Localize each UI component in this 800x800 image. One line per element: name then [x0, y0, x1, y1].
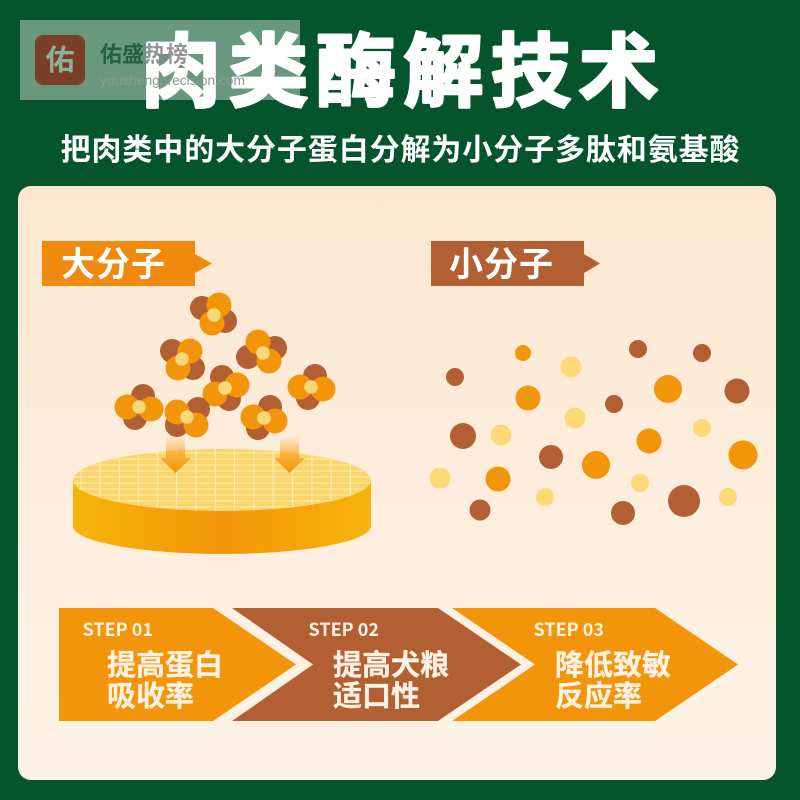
watermark url: youshengprecision.com: [100, 73, 245, 88]
label: large molecules: [42, 241, 212, 286]
step 3 arrow: 反应率: [555, 680, 642, 713]
title: 肉类酶解技术: [141, 28, 666, 117]
arrow: right down: [274, 436, 305, 473]
step 2 arrow: STEP 02: [308, 616, 379, 642]
step 1 arrow: STEP 01: [82, 616, 153, 642]
watermark: [20, 20, 300, 100]
step 1 arrow: 吸收率: [107, 680, 194, 713]
illustration: enzyme disc: [73, 449, 371, 554]
illustration: large molecule clusters: [114, 292, 336, 440]
watermark logo: [35, 35, 85, 85]
subtitle: 把肉类中的大分子蛋白分解为小分子多肽和氨基酸: [61, 134, 740, 167]
watermark name: 佑盛热榜: [100, 42, 188, 67]
panel: enzymolysis diagram: [18, 186, 776, 780]
step 3 arrow: [452, 608, 738, 721]
step 1 arrow: [59, 608, 296, 721]
step 2 arrow: [232, 608, 521, 721]
arrow: left down: [160, 436, 191, 473]
step 3 arrow: STEP 03: [534, 616, 604, 642]
step 3 arrow: 降低致敏: [555, 649, 671, 682]
label: large molecules: 大分子: [61, 246, 166, 284]
label: small molecules: [431, 241, 600, 286]
illustration: small molecules: [430, 340, 758, 525]
watermark logo: 佑: [45, 44, 75, 77]
label: small molecules: 小分子: [449, 246, 554, 284]
step 2 arrow: 提高犬粮: [333, 649, 449, 682]
step 1 arrow: 提高蛋白: [107, 649, 223, 682]
step 2 arrow: 适口性: [333, 680, 420, 713]
